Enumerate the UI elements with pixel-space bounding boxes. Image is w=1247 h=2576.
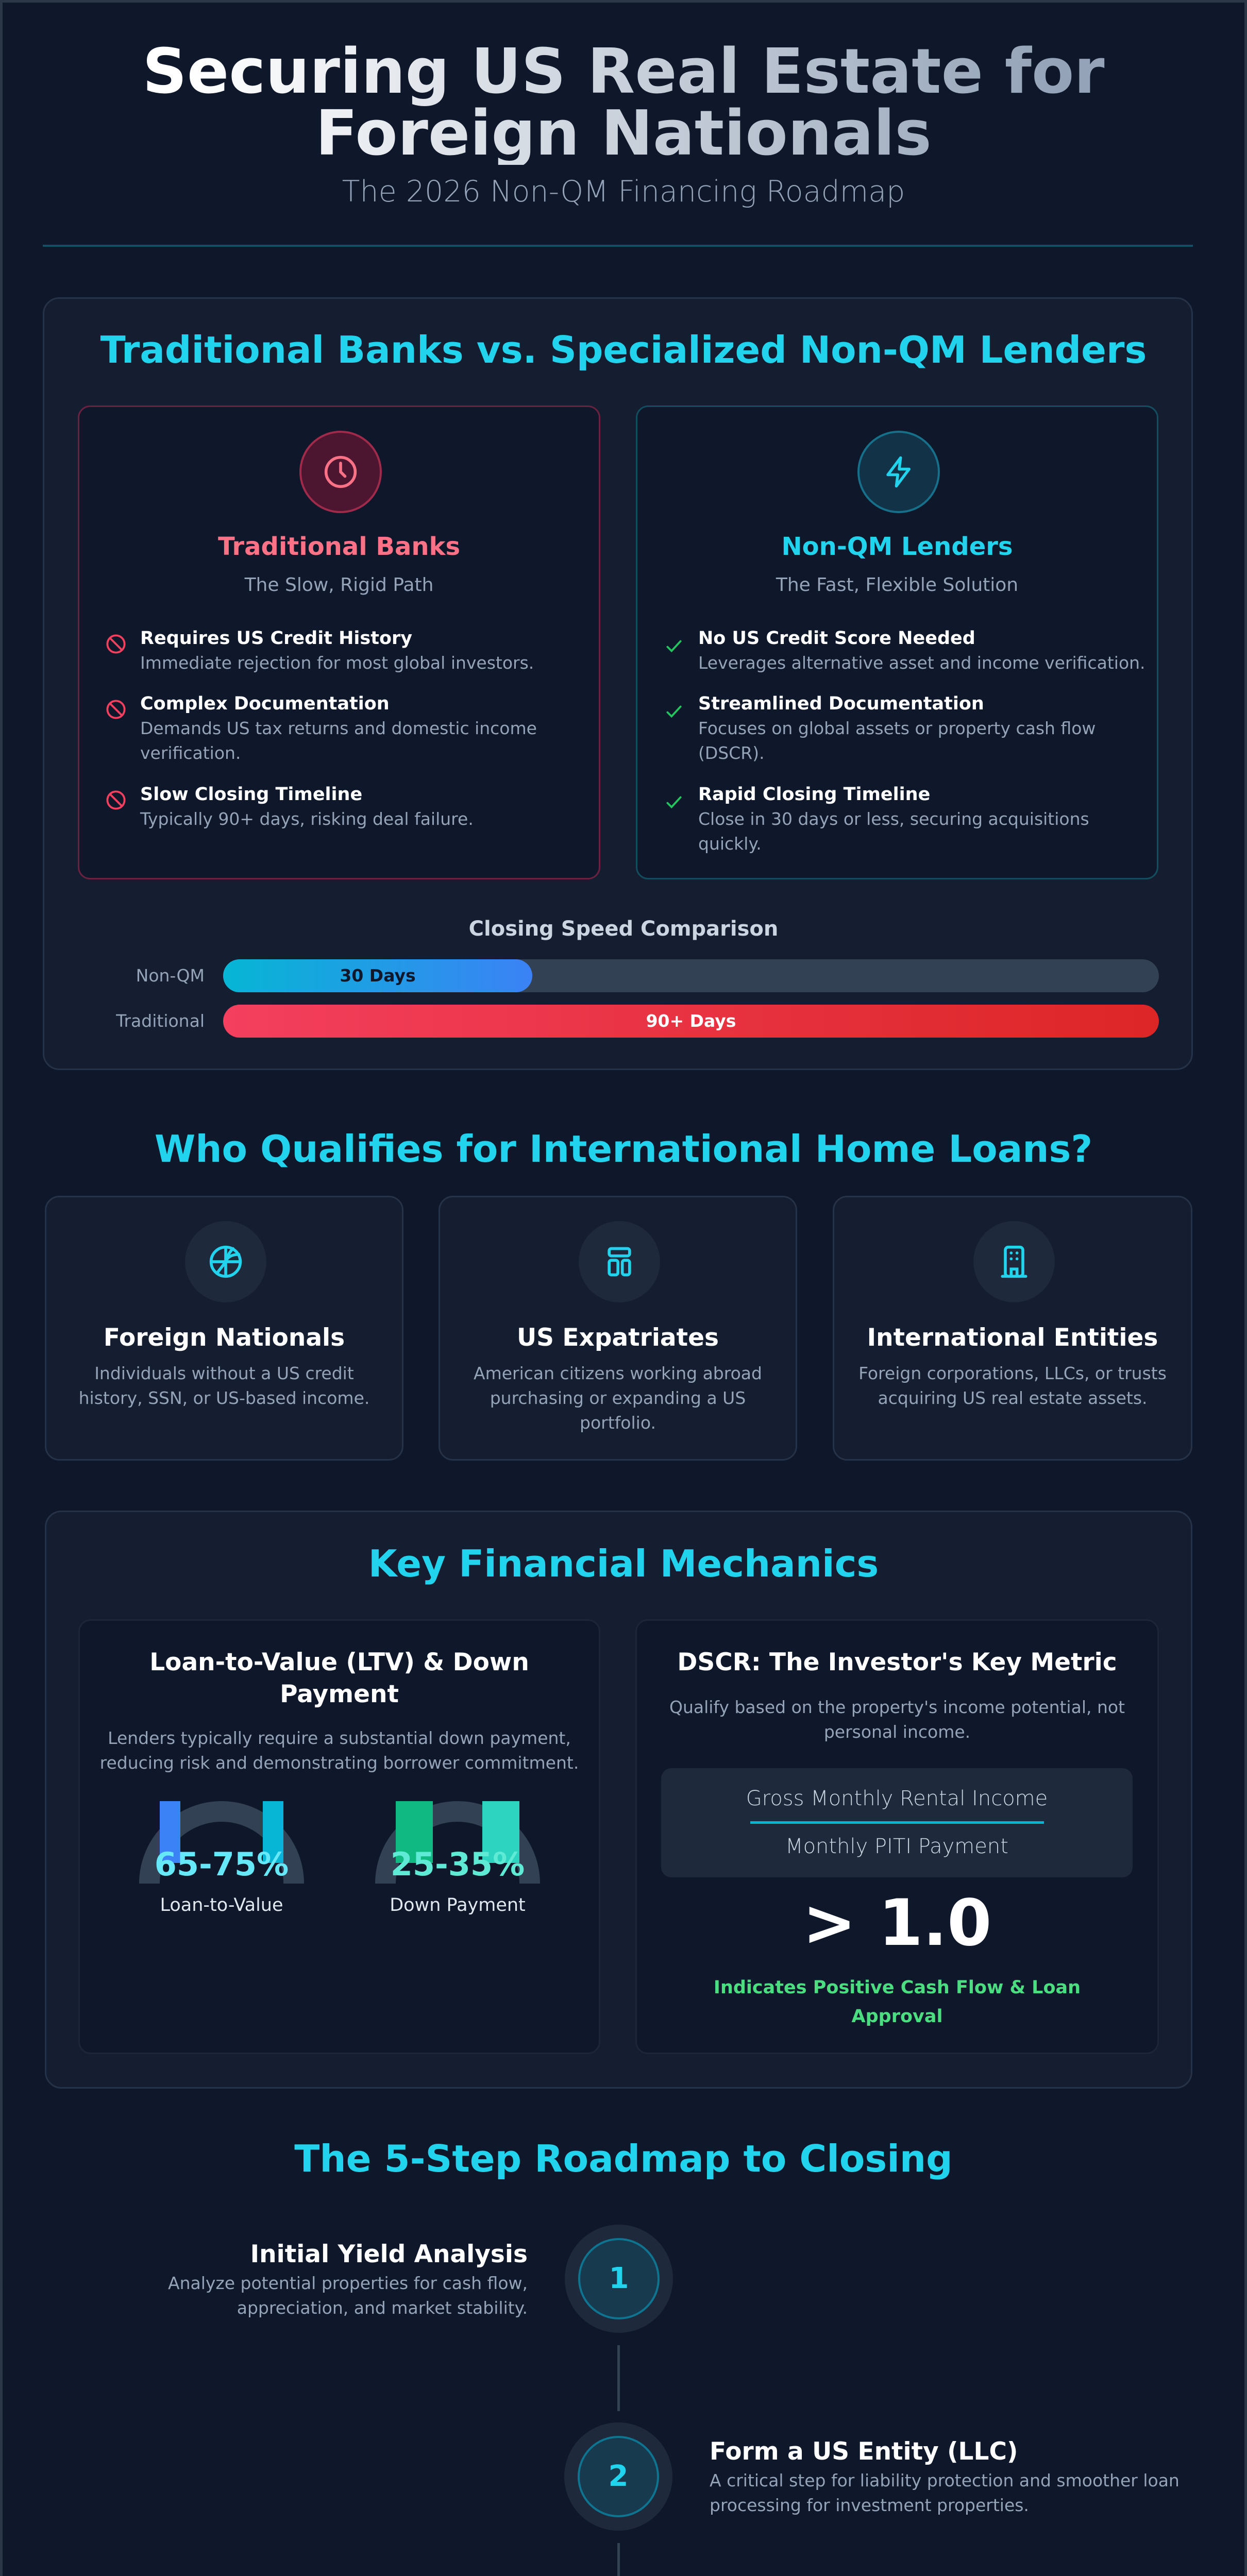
item 1 (666, 628, 1145, 673)
panel: key financial mechanics (45, 1511, 1192, 2089)
step 2: processing for investment properties. (710, 2495, 1029, 2515)
heading: roadmap: The 5-Step Roadmap to Closing (294, 2137, 953, 2180)
item 1: Requires US Credit History (140, 628, 412, 649)
card: traditional banks (78, 405, 600, 879)
card: ltv: Lenders typically require a substantial down payment, (108, 1728, 571, 1748)
card: ltv: Loan-to-Value (LTV) & Down (149, 1648, 529, 1676)
title: Securing US Real Estate for (142, 36, 1105, 108)
item 2: Complex Documentation (140, 693, 390, 714)
card: dscr: DSCR: The Investor's Key Metric (677, 1648, 1117, 1676)
heading: comparison: Traditional Banks vs. Specialized Non-QM Lenders (100, 328, 1147, 371)
card subtitle: The Fast, Flexible Solution (776, 574, 1018, 596)
icon: clock (299, 431, 382, 513)
icon: building (973, 1221, 1055, 1302)
chart: down payment gauge: Down Payment (390, 1895, 526, 1916)
bar chart: closing speed (116, 959, 1159, 1038)
step 2: Form a US Entity (LLC) (710, 2437, 1018, 2466)
item 3 (666, 784, 1089, 854)
item 1: No US Credit Score Needed (698, 628, 975, 649)
chart: ltv gauge: Loan-to-Value (160, 1895, 283, 1916)
connectors (617, 2345, 620, 2411)
step 1: Analyze potential properties for cash flow, (168, 2273, 528, 2293)
card: ltv: reducing risk and demonstrating borrower commitment. (100, 1753, 579, 1773)
card: ltv: Payment (280, 1680, 399, 1708)
chart title: closing speed: Closing Speed Comparison (469, 917, 778, 941)
card: foreign nationals: history, SSN, or US-based income. (79, 1388, 369, 1408)
item 3: Typically 90+ days, risking deal failure. (140, 809, 474, 829)
title (0, 41, 1247, 165)
bar non-qm: 30 Days (340, 965, 416, 986)
item 3: Close in 30 days or less, securing acquisitions (698, 809, 1089, 829)
panel: comparison (43, 297, 1193, 1070)
item 3: quickly. (698, 834, 762, 854)
item 1: Immediate rejection for most global investors. (140, 653, 534, 673)
formula box (661, 1768, 1133, 1877)
icon: lightning (857, 431, 940, 513)
card: us expatriates: purchasing or expanding a US (490, 1388, 746, 1408)
heading: key financial mechanics: Key Financial Mechanics (368, 1542, 879, 1585)
subtitle: The 2026 Non-QM Financing Roadmap (342, 175, 905, 209)
card: international entities (833, 1196, 1192, 1461)
step 1: 1 (609, 2262, 629, 2295)
card: foreign nationals: Individuals without a US credit (94, 1363, 354, 1383)
dscr caption (714, 1977, 1081, 2027)
item 1 (106, 628, 534, 673)
card: international entities: acquiring US real estate assets. (878, 1388, 1148, 1408)
item 3: Slow Closing Timeline (140, 784, 362, 805)
card: international entities: Foreign corporations, LLCs, or trusts (858, 1363, 1167, 1383)
icon: layout (579, 1221, 660, 1302)
card: foreign nationals: Foreign Nationals (104, 1324, 345, 1352)
bar label traditional: Traditional (116, 1011, 205, 1031)
item 2: verification. (140, 743, 241, 763)
bar traditional: 90+ Days (646, 1011, 736, 1031)
item 2 (106, 693, 537, 763)
card: non-qm lenders (636, 405, 1158, 879)
dscr caption: Indicates Positive Cash Flow & Loan (714, 1977, 1081, 1998)
step 2 (564, 2422, 1179, 2531)
chart: ltv gauge (139, 1801, 304, 1916)
item 2 (666, 693, 1096, 763)
item 3 (106, 784, 474, 829)
step 1: appreciation, and market stability. (237, 2298, 528, 2318)
dscr caption: Approval (852, 2006, 942, 2027)
bar label non-qm: Non-QM (136, 965, 205, 986)
step 1: Initial Yield Analysis (250, 2240, 528, 2268)
step 2: A critical step for liability protection and smoother loan (710, 2470, 1179, 2490)
step 1 (168, 2225, 673, 2333)
card: international entities: International Entities (867, 1324, 1158, 1352)
chart: down payment gauge (375, 1801, 540, 1916)
card title: Non-QM Lenders (781, 532, 1013, 561)
card: foreign nationals (45, 1196, 403, 1461)
card: us expatriates: US Expatriates (517, 1324, 719, 1352)
formula box: Gross Monthly Rental Income (746, 1787, 1048, 1810)
icon: globe (185, 1221, 266, 1302)
card: dscr: Qualify based on the property's income potential, not (669, 1697, 1125, 1717)
card title: Traditional Banks (218, 532, 460, 561)
item 2: (DSCR). (698, 743, 765, 763)
card: ltv (78, 1619, 600, 2054)
card: us expatriates: portfolio. (580, 1413, 656, 1433)
title: Foreign Nationals (315, 98, 932, 170)
heading: who qualifies: Who Qualifies for International Home Loans? (155, 1127, 1092, 1171)
card: us expatriates (439, 1196, 797, 1461)
card: dscr: personal income. (824, 1722, 970, 1742)
item 3: Rapid Closing Timeline (698, 784, 930, 805)
item 1: Leverages alternative asset and income verification. (698, 653, 1145, 673)
item 2: Focuses on global assets or property cash flow (698, 718, 1096, 738)
card subtitle: The Slow, Rigid Path (245, 574, 433, 596)
formula box: Monthly PITI Payment (785, 1835, 1008, 1858)
dscr value: > 1.0 (803, 1886, 991, 1960)
chart: ltv gauge: 65-75% (155, 1845, 289, 1883)
chart: down payment gauge: 25-35% (391, 1845, 525, 1883)
bar non-qm (223, 959, 532, 992)
item 2: Streamlined Documentation (698, 693, 984, 714)
card: dscr (635, 1619, 1159, 2054)
item 2: Demands US tax returns and domestic income (140, 718, 537, 738)
card: us expatriates: American citizens working abroad (474, 1363, 762, 1383)
bar traditional (223, 1005, 1159, 1038)
step 2: 2 (609, 2460, 628, 2493)
